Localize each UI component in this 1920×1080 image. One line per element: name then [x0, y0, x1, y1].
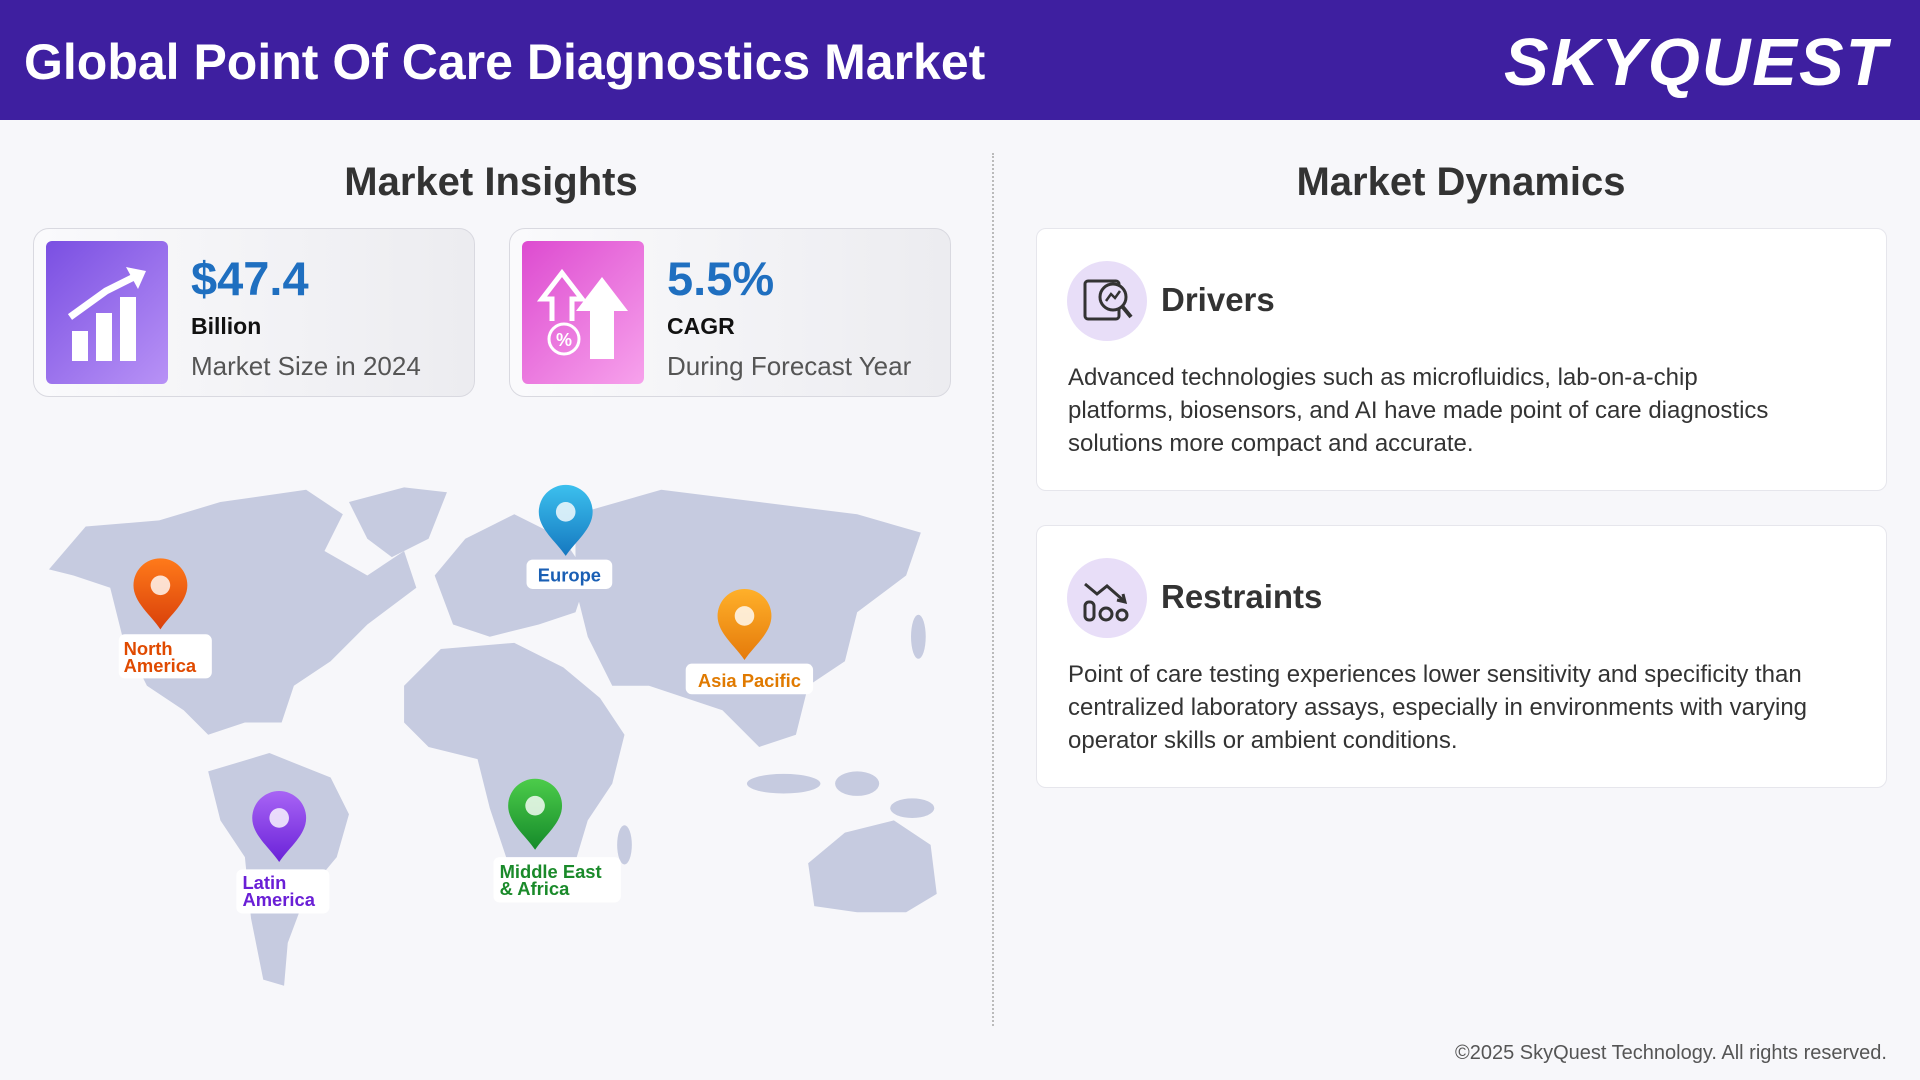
pin: Asia Pacific: Asia Pacific	[698, 670, 801, 691]
footer: ©2025 SkyQuest Technology. All rights reserved.	[1455, 1042, 1887, 1064]
pin: Middle East & Africa	[493, 779, 621, 902]
pin: Latin America	[236, 791, 329, 913]
panel: restraints: centralized laboratory assays, especially in environments with varying	[1068, 694, 1807, 721]
pin: Middle East & Africa: & Africa	[500, 878, 570, 899]
heading: market insights: Market Insights	[344, 160, 638, 204]
pin: Europe	[527, 485, 612, 589]
panel: drivers: Advanced technologies such as microfluidics, lab-on-a-chip	[1068, 364, 1698, 391]
pin: Asia Pacific	[686, 589, 813, 694]
panel: restraints	[1036, 525, 1887, 788]
pin: North America: North	[124, 638, 173, 659]
header bar	[0, 0, 1920, 120]
panel: drivers: Drivers	[1161, 281, 1275, 318]
pin: Latin America: America	[242, 889, 316, 910]
card: market size: $47.4	[191, 252, 309, 305]
panel: drivers: platforms, biosensors, and AI have made point of care diagnostics	[1068, 397, 1768, 424]
pin: North America	[119, 558, 212, 678]
panel: restraints: Restraints	[1161, 578, 1322, 615]
pin: Europe: Europe	[538, 565, 601, 586]
title: Global Point Of Care Diagnostics Market	[24, 34, 985, 90]
panel: drivers: solutions more compact and accurate.	[1068, 430, 1474, 457]
icon: bar chart	[46, 241, 168, 384]
panel: drivers	[1036, 228, 1887, 491]
logo: SKYQUEST	[1504, 25, 1889, 100]
card: CAGR	[509, 228, 951, 397]
icon: arrows with percent	[522, 241, 644, 384]
card: CAGR: CAGR	[667, 313, 735, 339]
pin: Latin America: Latin	[242, 872, 286, 893]
icon: restraints	[1067, 558, 1147, 638]
panel: restraints: Point of care testing experiences lower sensitivity and specificity than	[1068, 661, 1802, 688]
card: market size	[33, 228, 475, 397]
icon: drivers	[1067, 261, 1147, 341]
icon: arrows with percent: %	[556, 330, 572, 350]
card: market size: Billion	[191, 313, 261, 339]
heading: market dynamics: Market Dynamics	[1296, 160, 1626, 204]
pin: North America: America	[124, 655, 197, 676]
card: CAGR: 5.5%	[667, 252, 774, 305]
pin: Middle East & Africa: Middle East	[500, 861, 602, 882]
panel: restraints: operator skills or ambient conditions.	[1068, 727, 1458, 754]
card: market size: Market Size in 2024	[191, 351, 421, 381]
card: CAGR: During Forecast Year	[667, 351, 911, 381]
